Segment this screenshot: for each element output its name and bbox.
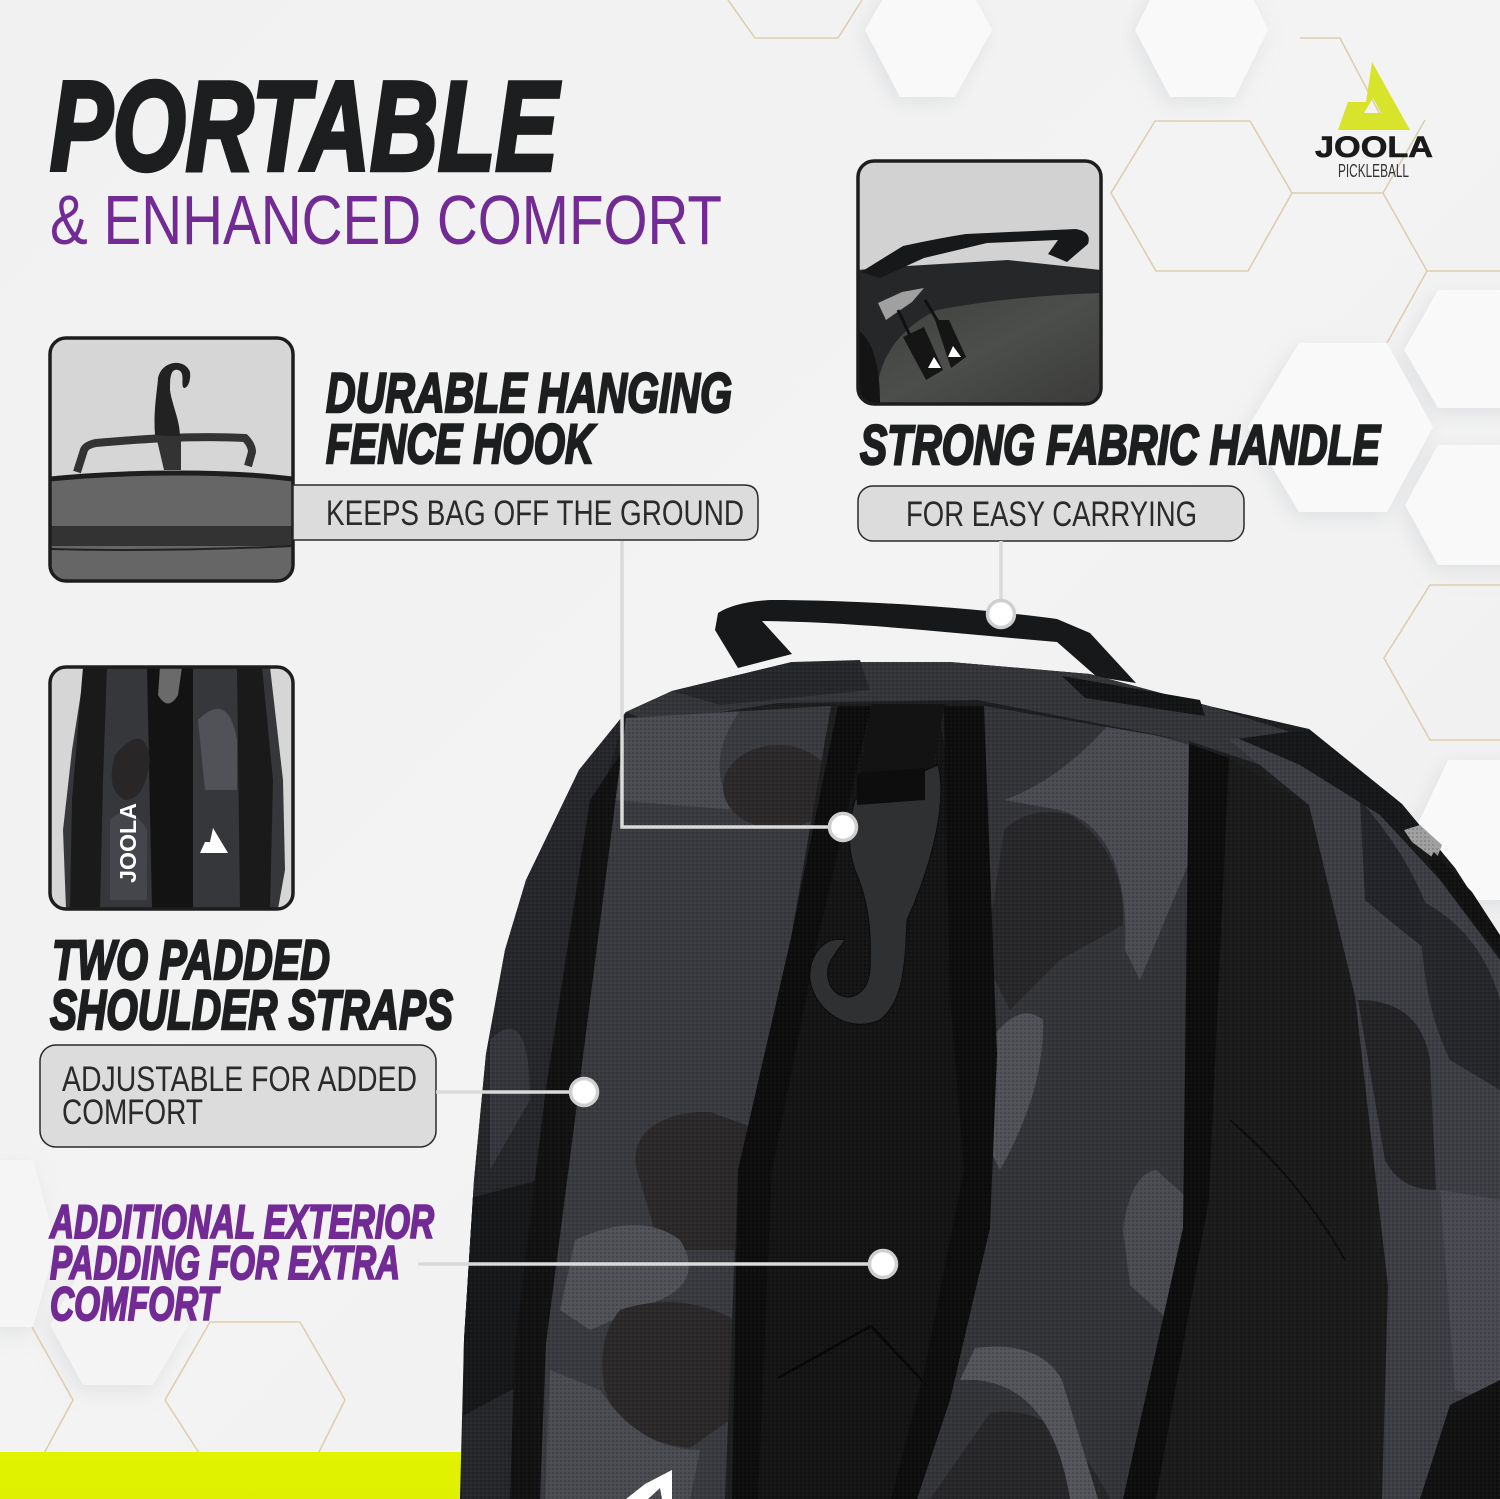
- photo frame: [858, 161, 1101, 404]
- photo: handle and zippers: [858, 161, 1101, 404]
- photo frame: [50, 338, 293, 581]
- lime footer band: [0, 1452, 464, 1499]
- icon: JOOLA mark: [1338, 62, 1410, 130]
- pill label: FOR EASY CARRYING: [906, 495, 1197, 534]
- logo wordmark: JOOLA: [1315, 131, 1433, 164]
- right strap band: [1123, 744, 1229, 1499]
- callout: fence hook: [50, 338, 758, 581]
- pill label: ADJUSTABLE FOR ADDED: [62, 1060, 417, 1099]
- line: handle: [999, 541, 1003, 614]
- subtitle line: enhanced comfort: & ENHANCED COMFORT: [50, 181, 722, 259]
- right side panel: [1220, 725, 1500, 1499]
- dot: hook: [830, 814, 856, 840]
- photo: backpack straps: [50, 667, 293, 909]
- line: fence hook: [622, 541, 843, 827]
- photo: fence hook on bag: [50, 338, 293, 581]
- pill label: KEEPS BAG OFF THE GROUND: [326, 494, 744, 533]
- title: [50, 55, 722, 259]
- heading: TWO PADDED: [52, 928, 330, 991]
- icon: fence hook: [810, 765, 941, 1024]
- dot: padding: [870, 1250, 896, 1278]
- connector lines: [418, 541, 1001, 1264]
- callout heading: exterior padding: COMFORT: [50, 1277, 221, 1330]
- callout heading: exterior padding: ADDITIONAL EXTERIOR: [49, 1195, 434, 1248]
- heading: [50, 928, 453, 1041]
- photo: backpack straps: JOOLA: [115, 803, 141, 883]
- title line: portable: PORTABLE: [50, 55, 560, 197]
- pill label: [293, 485, 758, 540]
- left side panel: [455, 710, 635, 1499]
- backpack photo: [455, 600, 1500, 1499]
- callout: shoulder straps: [40, 667, 453, 1147]
- center band left: [732, 706, 871, 1499]
- heading: [326, 361, 732, 475]
- dot: strap: [570, 1078, 598, 1106]
- hook strap: [860, 704, 945, 775]
- left band: [510, 746, 626, 1499]
- line: exterior padding: [418, 1262, 883, 1266]
- dot: handle: [988, 600, 1014, 628]
- logo tagline: PICKLEBALL: [1338, 161, 1409, 181]
- callout: fabric handle: [858, 161, 1381, 541]
- heading: SHOULDER STRAPS: [50, 978, 453, 1041]
- heading: FENCE HOOK: [326, 412, 597, 475]
- left strap: [535, 700, 845, 1499]
- center spine: [758, 706, 990, 1499]
- right center band: [891, 706, 997, 1499]
- fabric weave texture: [460, 662, 1500, 1499]
- white logo on bag: [626, 1470, 672, 1499]
- photo frame: [50, 667, 293, 909]
- callout heading: exterior padding: PADDING FOR EXTRA: [50, 1236, 400, 1289]
- line: shoulder straps: [436, 1090, 584, 1094]
- pill label: COMFORT: [62, 1093, 203, 1132]
- marker dots: [570, 600, 1014, 1278]
- heading: DURABLE HANGING: [326, 361, 732, 424]
- handle: [715, 600, 1136, 683]
- zipper pull: [1404, 825, 1500, 955]
- bag body: [460, 662, 1500, 1499]
- JOOLA Pickleball logo: [1315, 62, 1433, 181]
- pill label: [40, 1045, 436, 1147]
- top collar: [626, 662, 1440, 880]
- pill label: [858, 486, 1244, 541]
- right black panel: [1156, 758, 1388, 1499]
- right strap: [910, 700, 1200, 1499]
- callout heading: exterior padding: [49, 1195, 434, 1330]
